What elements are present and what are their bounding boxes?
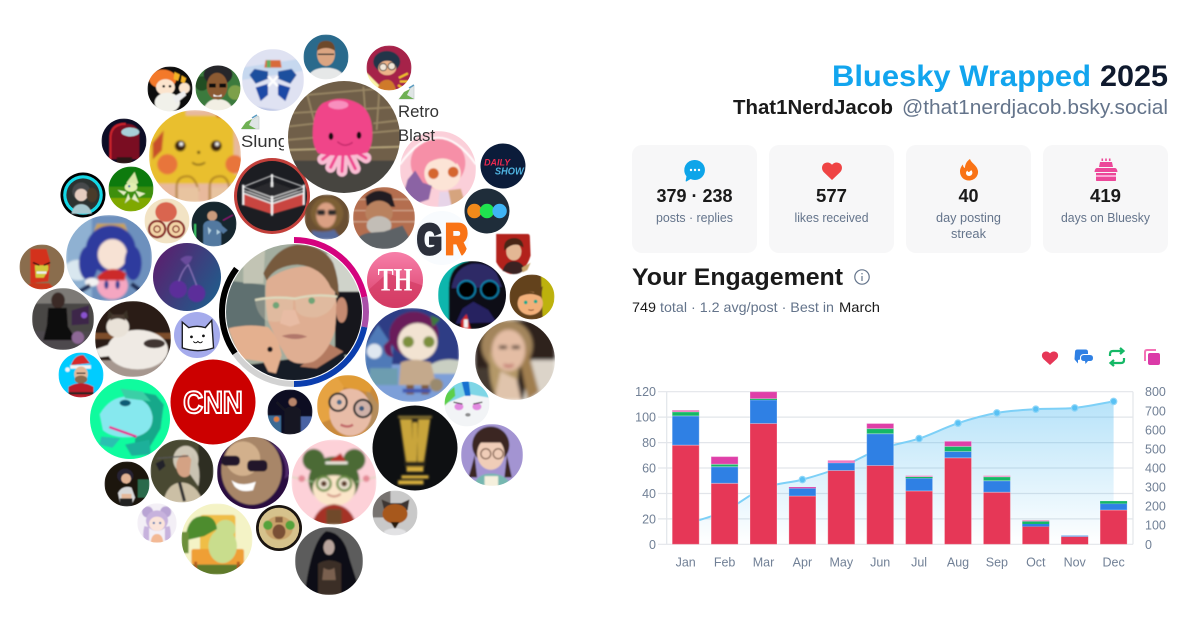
user name and handle: That1NerdJacob: [733, 97, 893, 119]
right axis labels: 800: [1145, 385, 1166, 399]
icon: quotes squares: [1145, 350, 1160, 365]
engagement summary: 749: [632, 299, 656, 315]
avatar: pikachu: [149, 110, 244, 202]
line markers: [799, 398, 1117, 483]
month labels: Jan: [676, 556, 696, 570]
avatar: CNN logo: [170, 360, 256, 444]
right axis labels: 600: [1145, 423, 1166, 437]
icon: cake: [1094, 158, 1118, 181]
avatar: GR logo: R: [445, 216, 468, 263]
icon: broken image: [399, 85, 414, 99]
avatar: pink holiday character: [292, 440, 376, 524]
engagement heading: Your Engagement: [632, 264, 843, 291]
avatar: CNN logo: CNN: [183, 385, 243, 420]
avatar: santa bitmoji: [58, 352, 104, 398]
month labels: Dec: [1102, 556, 1125, 570]
left axis labels: 120: [635, 385, 656, 399]
chart grid: [658, 392, 1133, 544]
avatar: GR logo: G: [417, 216, 442, 263]
broken image placeholder: Slunglines: [241, 115, 288, 151]
right axis labels: 300: [1145, 481, 1166, 495]
avatar: plush creature: [256, 505, 302, 551]
icon: likes heart: [1042, 351, 1058, 365]
stat card: day posting streak: 40: [958, 185, 978, 206]
avatar: pixel brown-haired boy: [510, 274, 554, 320]
bar: Nov: [1061, 535, 1088, 544]
avatar: gold trophy on black: [372, 406, 458, 490]
avatar: white-haired cosplay: [150, 440, 214, 502]
stat card: day posting streak: day posting: [936, 211, 1001, 225]
avatar: man on stage: [192, 202, 236, 246]
left axis labels: 60: [642, 462, 656, 476]
bar: Feb: [711, 457, 738, 544]
avatar: fox mask: [372, 490, 418, 536]
stat card: day posting streak: [906, 145, 1031, 253]
avatar: cyan ring character: [60, 172, 106, 218]
stat card: days on Bluesky: [1043, 145, 1168, 253]
icon: replies bubbles: [1074, 350, 1093, 364]
bar: Aug: [944, 441, 972, 544]
bar: May: [828, 460, 855, 544]
icon: info: [855, 270, 869, 284]
avatar: daily show: SHOW: [495, 167, 525, 178]
avatar: pixel bulbasaur: [90, 379, 170, 459]
portrait ring segments: [222, 240, 366, 384]
avatar: orange-haired fighter: [148, 66, 192, 112]
month labels: Jul: [911, 556, 927, 570]
avatar: smiling bald man with glasses: [217, 436, 292, 512]
bar: Mar: [750, 392, 777, 544]
broken image placeholder: Slunglines: Slung: [241, 132, 288, 151]
avatar: illustrated man with glasses: [195, 64, 242, 110]
combo chart: monthly engagement: [635, 385, 1166, 570]
month labels: Sep: [986, 556, 1008, 570]
month labels: Feb: [714, 556, 735, 570]
stat card: posts and replies: posts · replies: [656, 211, 733, 225]
left axis labels: 20: [642, 512, 656, 526]
avatar: red-orange creature: [20, 244, 64, 290]
avatar: wrestling ring: [234, 158, 310, 234]
icon: flame: [960, 159, 978, 180]
broken image placeholder: Retro Blast: Blast: [398, 126, 435, 145]
avatar: blue-haired elf: [444, 382, 490, 426]
avatar: daily show: DAILY: [484, 158, 511, 168]
avatar: blue-haired anime girl with kirby: [64, 215, 152, 301]
icon: heart: [822, 162, 842, 180]
stat card: day posting streak: streak: [951, 227, 987, 241]
avatar: daily show: [480, 144, 526, 188]
avatar: three dots logo: [464, 188, 510, 234]
left axis labels: 100: [635, 411, 656, 425]
avatar: among us crewmate: [102, 118, 146, 164]
engagement summary: March: [839, 299, 880, 315]
profile portrait: [222, 240, 367, 384]
avatar: GR logo: [417, 222, 468, 256]
month labels: Apr: [793, 556, 812, 570]
stacked bars: [672, 392, 1127, 544]
broken image placeholder: Retro Blast: Retro: [398, 102, 439, 121]
right axis labels: 0: [1145, 538, 1152, 552]
left axis labels: 40: [642, 487, 656, 501]
avatar: bearded man with beanie: [353, 187, 415, 249]
avatar bubble cluster: [20, 34, 555, 595]
bar: Oct: [1022, 520, 1049, 544]
portrait photo: [223, 240, 367, 383]
chart legend: [1042, 348, 1160, 366]
avatar: green sprite on green: [108, 166, 154, 212]
right axis labels: 400: [1145, 462, 1166, 476]
bar: Jul: [906, 476, 933, 544]
bar: Dec: [1100, 501, 1127, 544]
avatar: woman with glasses: [304, 194, 350, 240]
cumulative area: [686, 401, 1114, 544]
month labels: Aug: [947, 556, 969, 570]
avatar: cherry: [153, 243, 221, 311]
left axis labels: [635, 385, 656, 552]
avatar: glasses man on teal: [304, 34, 348, 80]
user name and handle: [733, 97, 1168, 119]
stat card: posts and replies: [632, 145, 757, 253]
avatar: glasses woman on purple: [461, 424, 523, 486]
avatar: red-background anime man: [496, 234, 531, 274]
broken image placeholder: Retro Blast: [398, 85, 439, 145]
avatar: animal crossing villager: [365, 308, 459, 402]
month labels: Oct: [1026, 556, 1046, 570]
right axis labels: 500: [1145, 442, 1166, 456]
avatar: pink-haired anime girl: [400, 131, 476, 209]
engagement summary: total · 1.2 avg/post · Best in: [660, 299, 834, 315]
avatar: blonde woman selfie: [475, 320, 555, 400]
month labels: Nov: [1064, 556, 1087, 570]
icon: broken image: [241, 115, 259, 129]
right axis labels: 200: [1145, 500, 1166, 514]
stat card: days on Bluesky: 419: [1090, 185, 1121, 206]
user name and handle: @that1nerdjacob.bsky.social: [902, 97, 1168, 119]
bar: Jan: [672, 410, 699, 544]
avatar: gothic dark-haired woman: [295, 527, 363, 595]
title: Bluesky Wrapped: [832, 60, 1091, 93]
month labels: [676, 556, 1125, 570]
avatar: white cat: [95, 301, 171, 377]
icon: reposts arrows: [1110, 348, 1124, 366]
icon: chat bubble: [684, 160, 705, 181]
avatar: TH logo: [367, 252, 423, 308]
right axis labels: 100: [1145, 519, 1166, 533]
avatar: pink octopus figure: [287, 80, 403, 197]
avatar: wrestler on stage: [268, 390, 312, 434]
avatar: swirl character: [144, 198, 190, 244]
left axis labels: 80: [642, 436, 656, 450]
stat card: likes received: 577: [816, 185, 847, 206]
bar: Apr: [789, 487, 816, 544]
cumulative line: [686, 401, 1114, 524]
avatar: black-haired anime fighter: [104, 462, 150, 506]
stat card: likes received: likes received: [794, 211, 869, 225]
stat card: days on Bluesky: days on Bluesky: [1061, 211, 1151, 225]
avatar: curly hair cartoon: [366, 46, 412, 90]
bar: Jun: [867, 424, 894, 544]
avatar: holographic crystal: [242, 49, 304, 111]
stat card: likes received: [769, 145, 894, 253]
title: 2025: [1100, 60, 1168, 93]
right axis labels: [1145, 385, 1166, 552]
avatar: dark outfit woman: [32, 288, 94, 350]
month labels: Mar: [753, 556, 774, 570]
stat card: posts and replies: 379 · 238: [656, 185, 732, 206]
avatar: TH logo: TH: [378, 263, 412, 299]
month labels: Jun: [870, 556, 890, 570]
engagement summary: [632, 299, 880, 315]
bar: Sep: [983, 476, 1010, 544]
avatar: cat face on lavender: [174, 312, 220, 358]
month labels: May: [829, 556, 854, 570]
avatar: lavender chibi: [137, 503, 177, 543]
avatar: darth vader with glasses: [438, 261, 510, 329]
right axis labels: 700: [1145, 404, 1166, 418]
left axis labels: 0: [649, 538, 656, 552]
avatar: chikorita on sofa: [182, 504, 252, 574]
avatar: selfie with round glasses: [317, 375, 379, 437]
